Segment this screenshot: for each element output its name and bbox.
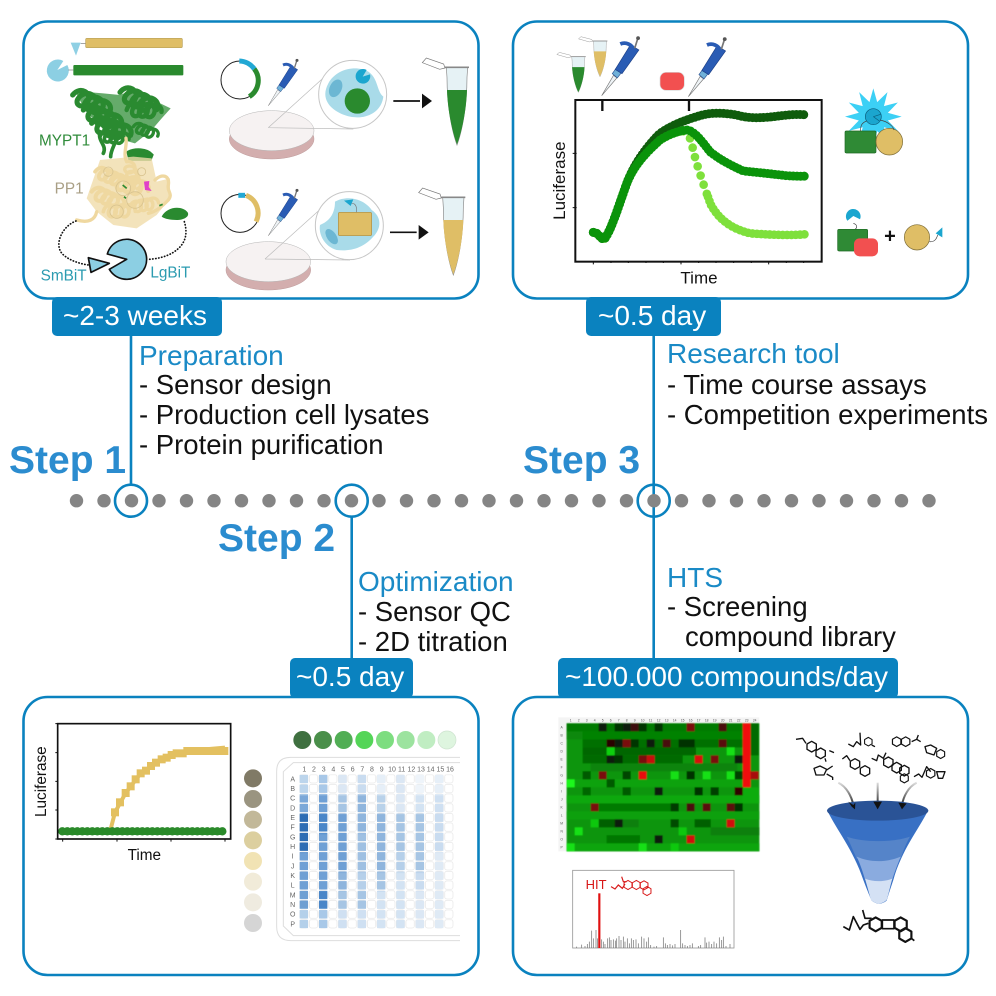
384-well plate: 1 [302, 766, 306, 773]
heatmap axis labels: 14 [673, 719, 677, 723]
384-well plate: K [290, 873, 295, 880]
label: SmBiT: SmBiT [41, 268, 87, 285]
heatmap axis labels: 19 [713, 719, 717, 723]
timeline marker: step 2 [336, 485, 368, 517]
heatmap axis labels: 7 [618, 719, 620, 723]
panel: preparation illustration [24, 22, 478, 298]
384-well plate: 3 [322, 766, 326, 773]
384-well plate: 11 [398, 766, 405, 773]
384-well plate: D [290, 805, 295, 812]
384-well plate: 9 [380, 766, 384, 773]
heatmap axis labels: 8 [626, 719, 628, 723]
text block: Optimization: - 2D titration [358, 626, 508, 657]
heatmap axis labels: J [561, 798, 563, 802]
protein shading [104, 167, 146, 218]
titration dots: green series [293, 731, 456, 749]
timeline dots [76, 494, 931, 507]
chart: time course [573, 100, 822, 264]
heatmap axis labels: 24 [753, 719, 757, 723]
titration dots: tan series [244, 769, 262, 932]
384-well plate: A [290, 776, 295, 783]
icon: LgBiT fragment [107, 239, 147, 279]
duration tag: step 2: ~0.5 day [296, 661, 404, 692]
heatmap axis labels: F [561, 766, 563, 770]
compound library molecules [796, 733, 945, 783]
heatmap axis labels: 23 [745, 719, 749, 723]
heading: Step 1: Step 1 [9, 439, 126, 482]
heading: Step 2: Step 2 [218, 517, 335, 560]
text block: Research tool: - Time course assays [667, 369, 927, 400]
label: PP1: PP1 [55, 180, 84, 197]
arrows into funnel [838, 783, 917, 805]
384-well plate: 2 [312, 766, 316, 773]
heatmap axis labels: L [561, 814, 563, 818]
heatmap axis labels: M [560, 822, 563, 826]
heatmap red cells [591, 723, 759, 843]
heatmap axis labels: H [560, 782, 563, 786]
heatmap axis labels: 4 [594, 719, 596, 723]
timeline marker: step 3 [638, 485, 670, 517]
heatmap axis labels: 20 [721, 719, 725, 723]
text block: Research tool: - Competition experiments [667, 399, 988, 430]
chart: hit identification [573, 870, 734, 948]
panel: research tool illustration [513, 22, 968, 298]
green tail helix [162, 208, 188, 220]
heatmap axis labels: D [560, 750, 563, 754]
icon: displaced sensor with competitor: + [884, 225, 896, 247]
heatmap axis labels: G [560, 774, 563, 778]
text block: HTS: HTS [667, 562, 723, 593]
384-well plate: J [291, 863, 294, 870]
heatmap axis labels: C [560, 742, 563, 746]
text block: Preparation: - Production cell lysates [139, 399, 429, 430]
heatmap axis labels: 18 [705, 719, 709, 723]
heatmap axis labels: 15 [681, 719, 685, 723]
text block: Research tool [667, 338, 988, 430]
heatmap axis labels: 17 [697, 719, 701, 723]
timeline connector: step 2 [350, 517, 353, 659]
384-well plate: C [290, 796, 295, 803]
label: HIT: HIT [586, 877, 607, 892]
384-well plate: P [290, 921, 295, 928]
heatmap axis labels: P [561, 846, 564, 850]
heatmap tone rows [567, 723, 759, 851]
protein structure: MYPT1 [70, 86, 171, 159]
384-well plate: O [290, 912, 296, 919]
workflow row: yellow construct [221, 188, 465, 290]
icon: displaced sensor with competitor [838, 208, 942, 256]
heatmap axis labels: N [560, 830, 563, 834]
dotted linkers [59, 221, 186, 265]
heatmap axis labels: 10 [641, 719, 645, 723]
label: LgBiT: LgBiT [150, 264, 191, 281]
panel: optimization illustration [24, 697, 478, 975]
selected compound molecule [843, 910, 914, 942]
384-well plate: N [290, 902, 295, 909]
384-well plate [277, 757, 460, 941]
heatmap axis labels: B [561, 734, 564, 738]
384-well plate: H [290, 844, 295, 851]
heatmap: screening plate [558, 717, 759, 851]
icon: active sensor with luminescence [845, 88, 903, 155]
text block: HTS [667, 562, 896, 652]
duration tag: step 1: ~2-3 weeks [63, 300, 207, 331]
duration tag: step 3: ~0.5 day [598, 300, 706, 331]
label: MYPT1: MYPT1 [39, 133, 90, 150]
axis label: Luciferase: Luciferase [550, 141, 569, 220]
384-well plate: 13 [417, 766, 425, 773]
construct bars [47, 38, 183, 82]
384-well plate: 15 [436, 766, 444, 773]
text block: Preparation: - Protein purification [139, 429, 384, 460]
axis label: Time: Time [680, 268, 718, 287]
heatmap axis labels: 2 [578, 719, 580, 723]
384-well plate: F [291, 825, 295, 832]
icon: competitor protein [660, 72, 684, 90]
384-well plate: 16 [446, 766, 454, 773]
384-well plate: 4 [331, 766, 335, 773]
text block: HTS: - Screening [667, 591, 808, 622]
duration tag: step 3 [586, 297, 721, 336]
text block: Preparation: Preparation [139, 340, 284, 371]
protein structure: PP1 [77, 138, 170, 228]
text block: Optimization: Optimization [358, 566, 514, 597]
384-well plate: 12 [407, 766, 415, 773]
hit molecule [611, 877, 651, 896]
heatmap axis labels: E [561, 758, 564, 762]
workflow row: green construct [221, 58, 469, 159]
panel: HTS illustration [513, 697, 968, 975]
384-well plate: L [291, 883, 295, 890]
timeline marker: step 1 [115, 485, 147, 517]
chart: luciferase time course [55, 724, 231, 842]
text block: Optimization: - Sensor QC [358, 596, 511, 627]
heatmap axis labels: O [560, 838, 563, 842]
active site marks [123, 181, 163, 206]
duration tag: step 1 [52, 297, 222, 336]
heatmap axis labels: K [561, 806, 564, 810]
axis label: Time: Time [128, 847, 161, 864]
timeline connector: step 1 [130, 336, 132, 485]
heatmap axis labels: I [561, 790, 562, 794]
heatmap axis labels: 13 [665, 719, 669, 723]
heatmap axis labels: 22 [737, 719, 741, 723]
heatmap axis labels: A [561, 726, 564, 730]
timeline connector: step 3 [652, 336, 655, 659]
384-well plate: 14 [427, 766, 435, 773]
heatmap axis labels: 9 [634, 719, 636, 723]
heading: Step 3: Step 3 [523, 439, 640, 482]
384-well plate: 5 [341, 766, 345, 773]
series: medium green [593, 130, 807, 239]
heatmap axis labels [560, 719, 757, 850]
heatmap axis labels: 16 [689, 719, 693, 723]
duration tag: step 3 throughput: ~100.000 compounds/day [565, 661, 888, 692]
tubes and pipettes [557, 36, 727, 97]
duration tag: step 2 [290, 658, 413, 698]
heatmap axis labels: 6 [610, 719, 612, 723]
text block: HTS: compound library [685, 621, 896, 652]
heatmap bright cells [567, 747, 735, 851]
384-well plate: 7 [360, 766, 364, 773]
384-well plate: 8 [370, 766, 374, 773]
384-well plate: B [290, 786, 295, 793]
text block: Research tool: Research tool [667, 338, 840, 369]
heatmap axis labels: 1 [570, 719, 572, 723]
384-well plate: 6 [351, 766, 355, 773]
series: dark green [593, 113, 807, 239]
axis label: Luciferase: Luciferase [33, 746, 50, 817]
text block: Preparation [139, 340, 429, 460]
384-well plate: 10 [388, 766, 396, 773]
heatmap axis labels: 11 [649, 719, 653, 723]
384-well plate: G [290, 834, 295, 841]
heatmap axis labels: 12 [657, 719, 661, 723]
series: light green [593, 131, 687, 239]
384-well plate: I [292, 854, 294, 861]
icon: SmBiT fragment [88, 258, 109, 272]
text block: Optimization [358, 566, 514, 657]
heatmap axis labels: 3 [586, 719, 588, 723]
384-well plate: E [290, 815, 295, 822]
heatmap dark cells [583, 723, 743, 843]
384-well plate: M [290, 892, 296, 899]
heatmap axis labels: 21 [729, 719, 733, 723]
funnel [827, 801, 928, 904]
text block: Preparation: - Sensor design [139, 369, 332, 400]
heatmap axis labels: 5 [602, 719, 604, 723]
